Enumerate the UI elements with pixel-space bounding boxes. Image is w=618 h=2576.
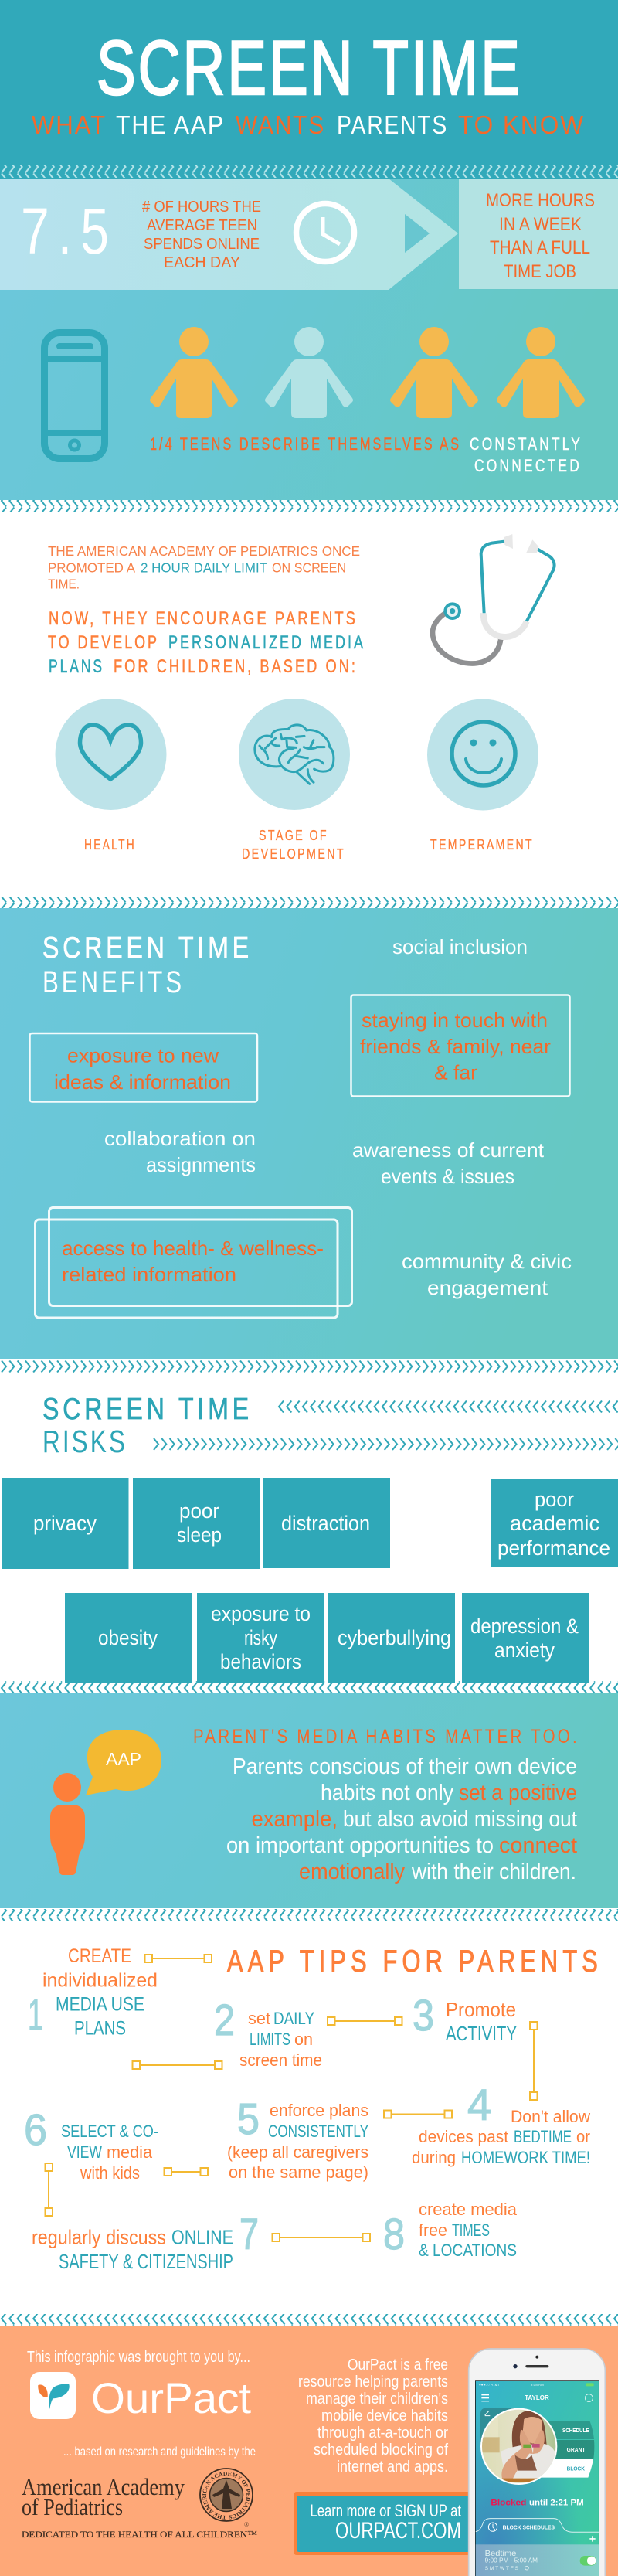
risk: depression and anxiety: depression &: [470, 1615, 579, 1638]
tip 4: bedtime and homework: 4: [467, 2081, 491, 2130]
tip 2: daily limits: 2: [214, 1996, 235, 2045]
benefit: staying in touch: & far: [434, 1060, 477, 1084]
text: hours description: AVERAGE TEEN: [147, 217, 257, 234]
tip 3: promote activity: Promote: [446, 1998, 516, 2021]
panel: parent media habits: [0, 1693, 618, 1908]
benefit: exposure to new ideas: [29, 1033, 257, 1102]
benefit: collaboration: [104, 1127, 256, 1176]
text: habits paragraph: [226, 1754, 577, 1884]
panel: screen time benefits: [0, 908, 618, 1359]
risk: distraction: distraction: [281, 1512, 370, 1535]
risk: obesity: [65, 1593, 192, 1683]
tip 8: media free times: & LOCATIONS: [419, 2241, 517, 2260]
text: previous limit: TIME.: [48, 577, 80, 592]
text: previous limit: [48, 543, 360, 592]
seal: ®: [244, 2521, 249, 2528]
benefit: access to health information: [36, 1207, 352, 1318]
heading: benefits: SCREEN TIME: [42, 931, 253, 965]
tip 6: select and co-view: 6: [24, 2105, 47, 2155]
tip 5: enforce consistently: 5: [237, 2094, 260, 2144]
risk: exposure to risky behaviors: behaviors: [220, 1650, 301, 1673]
icon: smiley: [452, 722, 515, 785]
risk: privacy: [2, 1478, 128, 1569]
icon: clock: [297, 204, 354, 261]
risk: poor sleep: poor: [179, 1499, 219, 1523]
blocked status: Blocked: [491, 2498, 526, 2507]
tip 4: bedtime and homework: devices past: [419, 2127, 508, 2146]
benefit: access to health information: access to health- & wellness-: [62, 1237, 324, 1260]
callout: more hours than a job: IN A WEEK: [499, 214, 582, 235]
tip 1: media use plans: PLANS: [74, 2017, 126, 2039]
text: previous limit: THE AMERICAN ACADEMY OF PEDIATRICS ONCE: [48, 543, 360, 559]
tip 1: media use plans: 1: [28, 1990, 43, 2040]
tip 6: select and co-view: media: [107, 2142, 153, 2162]
tip 1: media use plans: CREATE: [68, 1945, 131, 1967]
tip 8: media free times: free: [419, 2220, 447, 2240]
phone mockup: OurPact app: 9:00 PM - 5:00 AM: [485, 2557, 538, 2564]
heading: benefits: [42, 931, 253, 999]
logo: American Academy of Pediatrics: American Academy: [22, 2473, 185, 2500]
text: previous limit: ON SCREEN: [272, 560, 346, 575]
seal: THE AMERICAN ACADEMY OF PEDIATRICS: [202, 2472, 250, 2520]
icon: parent figure: [50, 1773, 85, 1875]
text: habits paragraph: habits not only: [321, 1781, 453, 1805]
text: hours description: SPENDS ONLINE: [144, 236, 260, 253]
tip 2: daily limits: LIMITS: [250, 2030, 290, 2049]
panel: page header: [0, 0, 618, 179]
phone mockup: OurPact app: Bedtime: [485, 2550, 516, 2558]
tip 4: bedtime and homework: BEDTIME: [514, 2127, 572, 2146]
subtitle: [32, 111, 585, 139]
text: personalized media plans: [48, 608, 365, 677]
risk: poor academic performance: poor: [535, 1488, 574, 1511]
tip 5: enforce consistently: [227, 2094, 368, 2182]
text: personalized media plans: PLANS: [49, 656, 104, 677]
text: one in four teens: 1/4 TEENS DESCRIBE THEMSELVES AS: [150, 434, 461, 454]
arrow banner: hours online: [0, 179, 458, 290]
tip 8: media free times: TIMES: [452, 2220, 490, 2240]
risk: exposure to risky behaviors: risky: [244, 1626, 277, 1649]
callout: sign up button: OURPACT.COM: [335, 2518, 461, 2544]
factor: health: HEALTH: [84, 837, 136, 852]
tip 3: promote activity: [413, 1991, 517, 2045]
subtitle: WHAT: [32, 111, 107, 139]
benefit: community engagement: engagement: [427, 1276, 548, 1299]
factor: stage of development: [239, 699, 350, 862]
subtitle: WANTS: [236, 111, 325, 139]
risk: poor academic performance: [491, 1479, 618, 1567]
text: habits paragraph: but also avoid missing out: [343, 1807, 577, 1832]
tip 5: enforce consistently: enforce plans: [270, 2101, 368, 2120]
logo: American Academy of Pediatrics: of Pediatrics: [22, 2493, 123, 2520]
risk tiles: [2, 1478, 618, 1683]
callout: sign up button: [294, 2492, 479, 2555]
text: about OurPact: scheduled blocking of: [314, 2441, 448, 2459]
benefit: collaboration: assignments: [146, 1153, 256, 1176]
tip 5: enforce consistently: (keep all caregivers: [227, 2142, 368, 2162]
risk: distraction: [263, 1478, 390, 1568]
icon: heart: [80, 725, 141, 779]
phone mockup: OurPact app: until 2:21 PM: [529, 2498, 584, 2507]
phone mockup: OurPact app: 9:08 AM: [531, 2383, 544, 2387]
text: habits paragraph: Parents conscious of their own device: [233, 1754, 577, 1779]
callout: more hours than a job: TIME JOB: [504, 261, 576, 282]
phone mockup: OurPact app: BLOCK SCHEDULES: [503, 2525, 555, 2530]
connectors between tips: [45, 1955, 538, 2241]
callout: more hours than a job: MORE HOURS: [486, 190, 595, 211]
heading: benefits: BENEFITS: [42, 965, 185, 999]
benefit: staying in touch: friends & family, near: [360, 1035, 551, 1058]
app header: [481, 2395, 489, 2401]
factor: stage of development: DEVELOPMENT: [242, 846, 345, 862]
heading: risks: [42, 1393, 253, 1459]
subtitle: PARENTS: [337, 111, 448, 139]
text: about OurPact: manage their children's: [306, 2390, 448, 2408]
phone mockup: OurPact app: SMTWTFS: [485, 2566, 519, 2571]
tip 7: online safety: SAFETY & CITIZENSHIP: [59, 2250, 233, 2273]
benefit: awareness of events: events & issues: [381, 1165, 514, 1188]
tip 2: daily limits: set: [248, 2009, 270, 2028]
text: hours description: [142, 199, 261, 271]
text: previous limit: PROMOTED A: [48, 560, 135, 575]
benefit: exposure to new ideas: ideas & information: [54, 1070, 231, 1094]
tip 5: enforce consistently: on the same page): [229, 2163, 368, 2182]
tip 7: online safety: 7: [239, 2210, 259, 2259]
icon: speech bubble: AAP: [106, 1749, 141, 1769]
callout: sign up button: Learn more or SIGN UP at: [311, 2501, 461, 2520]
text: personalized media plans: TO DEVELOP: [48, 632, 159, 653]
tip 8: media free times: 8: [383, 2210, 405, 2259]
text: about OurPact: through at-a-touch or: [317, 2424, 448, 2442]
tip 6: select and co-view: SELECT & CO-: [61, 2122, 158, 2141]
text: about OurPact: resource helping parents: [298, 2373, 448, 2391]
block schedules tab: [476, 2519, 599, 2532]
benefit: collaboration: collaboration on: [104, 1127, 256, 1150]
schedule row: [476, 2544, 599, 2576]
tip 2: daily limits: on: [294, 2030, 313, 2049]
text: hours description: # OF HOURS THE: [142, 199, 261, 216]
icon: smartphone: [44, 332, 105, 459]
subtitle: TO KNOW: [458, 111, 585, 139]
text: about OurPact: mobile device habits: [321, 2407, 448, 2425]
benefit: community engagement: [402, 1250, 572, 1299]
text: one in four teens: CONSTANTLY: [470, 434, 582, 454]
phone mockup: OurPact app: TAYLOR: [525, 2394, 549, 2401]
text: hours description: EACH DAY: [164, 254, 240, 271]
risk: cyberbullying: cyberbullying: [338, 1626, 451, 1649]
tip 7: online safety: regularly discuss: [32, 2226, 166, 2249]
tip 7: online safety: [32, 2210, 259, 2273]
tip 8: media free times: [383, 2200, 518, 2260]
phone mockup: OurPact app: GRANT: [567, 2446, 586, 2453]
tip 6: select and co-view: [24, 2105, 158, 2183]
text: one in four teens: CONNECTED: [474, 456, 582, 475]
icon: speech bubble: [86, 1730, 161, 1795]
panel: AAP recommendation: [0, 512, 618, 897]
benefit: exposure to new ideas: exposure to new: [67, 1043, 219, 1067]
tip 2: daily limits: DAILY: [273, 2009, 314, 2028]
panel: AAP tips: [24, 1945, 603, 2273]
callout: more hours than a job: THAN A FULL: [490, 237, 590, 258]
tip 2: daily limits: screen time: [239, 2050, 322, 2070]
benefit: staying in touch: [351, 995, 570, 1096]
tip 8: media free times: create media: [419, 2200, 518, 2219]
benefit: awareness of events: awareness of current: [352, 1138, 545, 1162]
tip 7: online safety: ONLINE: [171, 2226, 233, 2249]
factor: health: [56, 699, 167, 852]
icon: brain: [255, 725, 334, 784]
text: about OurPact: internet and apps.: [337, 2458, 448, 2476]
risk: privacy: privacy: [33, 1512, 97, 1535]
logo: American Academy of Pediatrics: DEDICATED TO THE HEALTH OF ALL CHILDREN™: [22, 2529, 257, 2540]
panel: footer: [0, 2314, 618, 2576]
risk: obesity: obesity: [98, 1626, 158, 1649]
text: brought to you by: This infographic was brought to you by...: [27, 2349, 250, 2366]
text: personalized media plans: PERSONALIZED MEDIA: [168, 632, 365, 653]
tip 2: daily limits: [214, 1996, 322, 2070]
phone mockup: OurPact app: [469, 2349, 605, 2576]
text: habits paragraph: on important opportunities to: [226, 1833, 494, 1858]
panel: teen statistics: [0, 179, 618, 500]
risk: depression and anxiety: anxiety: [494, 1638, 555, 1662]
text: personalized media plans: FOR CHILDREN, BASED ON:: [114, 656, 358, 677]
tip 1: media use plans: individualized: [42, 1969, 158, 1991]
logo: OurPact: OurPact: [91, 2374, 251, 2422]
number: 7.5 hours: 7.5: [21, 195, 117, 267]
icon: stethoscope: [433, 534, 555, 663]
tip 4: bedtime and homework: during: [412, 2148, 456, 2167]
tip 4: bedtime and homework: or: [576, 2127, 590, 2146]
tip 3: promote activity: 3: [413, 1991, 434, 2040]
heading: risks: SCREEN TIME: [42, 1393, 253, 1426]
tip 3: promote activity: ACTIVITY: [446, 2022, 517, 2045]
text: habits paragraph: example,: [252, 1807, 338, 1832]
risk: poor academic performance: performance: [497, 1536, 610, 1560]
factor: temperament: [427, 699, 538, 852]
logo: American Academy of Pediatrics: [22, 2468, 257, 2540]
logo: OurPact: [30, 2372, 251, 2422]
tip 4: bedtime and homework: HOMEWORK TIME!: [461, 2148, 590, 2167]
benefit: community engagement: community & civic: [402, 1250, 572, 1273]
text: personalized media plans: NOW, THEY ENCOURAGE PARENTS: [49, 608, 358, 629]
factor: temperament: TEMPERAMENT: [430, 837, 534, 852]
phone mockup: OurPact app: i: [589, 2396, 590, 2401]
text: research credit: ... based on research and guidelines by the: [63, 2445, 256, 2459]
factor: stage of development: STAGE OF: [259, 828, 328, 843]
risk: exposure to risky behaviors: [197, 1593, 324, 1683]
callout: more hours than a job: [459, 179, 618, 289]
tip 5: enforce consistently: CONSISTENTLY: [268, 2122, 368, 2141]
icon: four teens, one highlighted: [150, 327, 585, 418]
child photo: [480, 2408, 557, 2485]
tip 1: media use plans: [28, 1945, 158, 2040]
text: habits paragraph: with their children.: [411, 1860, 576, 1884]
tip 1: media use plans: MEDIA USE: [56, 1994, 144, 2016]
phone mockup: OurPact app: SCHEDULE: [562, 2427, 589, 2434]
phone mockup: OurPact app: BLOCK: [567, 2465, 586, 2472]
risk: cyberbullying: [328, 1593, 455, 1683]
text: about OurPact: [298, 2356, 448, 2476]
risk: poor sleep: [133, 1478, 260, 1569]
benefit: awareness of events: [352, 1138, 545, 1188]
tip 4: bedtime and homework: [412, 2081, 590, 2167]
text: habits paragraph: set a positive: [459, 1781, 577, 1805]
benefit: staying in touch: staying in touch with: [362, 1009, 548, 1032]
text: habits paragraph: emotionally: [299, 1860, 405, 1884]
text: habits paragraph: connect: [499, 1833, 577, 1858]
text: previous limit: 2 HOUR DAILY LIMIT: [141, 560, 267, 575]
risk: poor sleep: sleep: [177, 1523, 222, 1547]
tip 6: select and co-view: VIEW: [67, 2142, 102, 2162]
benefit: access to health information: related information: [62, 1263, 236, 1286]
risk: exposure to risky behaviors: exposure to: [211, 1602, 311, 1625]
risk: depression and anxiety: [462, 1593, 589, 1683]
benefit: social inclusion: social inclusion: [392, 935, 528, 958]
tip 4: bedtime and homework: Don't allow: [511, 2107, 590, 2126]
text: one in four teens: [150, 434, 582, 475]
child profile menu: [480, 2408, 519, 2445]
tip 6: select and co-view: with kids: [80, 2163, 140, 2183]
text: about OurPact: OurPact is a free: [348, 2356, 448, 2374]
heading: risks: RISKS: [42, 1424, 127, 1459]
risk: poor academic performance: academic: [510, 1512, 599, 1535]
panel: screen time risks: [0, 1393, 618, 1693]
status bar: ●●●○○ AT&T: [479, 2383, 500, 2387]
subtitle: THE AAP: [116, 111, 225, 139]
chevron divider: [0, 1681, 618, 1693]
